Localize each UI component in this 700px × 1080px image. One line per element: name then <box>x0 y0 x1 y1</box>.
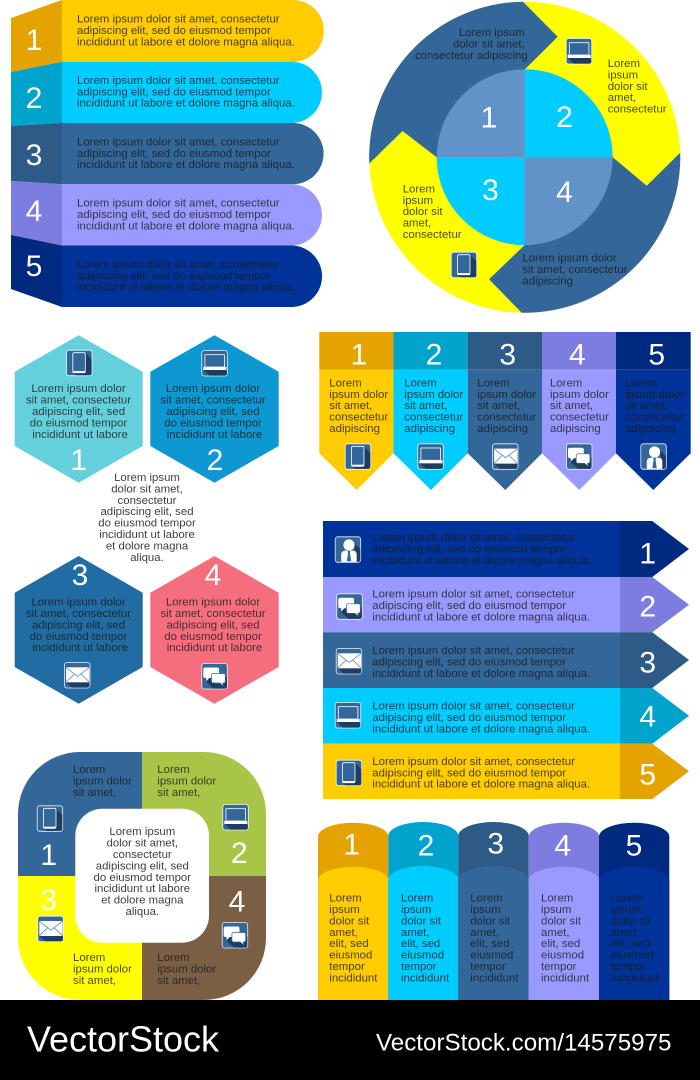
row 1: incididunt ut labore et dolore magna aliqua. <box>77 36 295 48</box>
arrow row 5: Lorem ipsum dolor sit amet, consectetur <box>372 756 575 768</box>
arrow row 2: Lorem ipsum dolor sit amet, consectetur <box>372 589 575 601</box>
row 5: incididunt ut labore et dolore magna aliqua. <box>77 282 295 294</box>
arrow row 4: incididunt ut labore et dolore magna aliqua. <box>372 723 590 735</box>
text: bottom-right: Lorem <box>157 952 190 964</box>
capped column 4: dolor sit <box>541 915 582 927</box>
capped column 4: ipsum <box>541 904 571 916</box>
capped column 3: incididunt <box>470 973 519 985</box>
capped column 5: Lorem <box>611 893 643 905</box>
panel: downward arrow columns <box>319 332 691 490</box>
arrow row 3: incididunt ut labore et dolore magna aliqua. <box>372 668 590 680</box>
arrow row 1: incididunt ut labore et dolore magna aliqua. <box>372 555 590 567</box>
column 5: 5 <box>648 338 665 371</box>
number 3: 3 <box>482 174 499 207</box>
column 1: consectetur <box>329 412 388 424</box>
row 3: 3 <box>26 139 42 172</box>
capped column 4: 4 <box>554 830 571 863</box>
row 3 <box>11 123 324 184</box>
text: centre: Lorem ipsum <box>109 826 175 838</box>
footer logo: VectorStock <box>27 1019 220 1060</box>
text: centre: et dolore magna <box>101 895 184 907</box>
hexagon 3: 3 <box>72 559 88 592</box>
text: centre: adipiscing elit, sed <box>96 860 189 872</box>
capped column 4: amet, <box>541 927 570 939</box>
arrow row 4: 4 <box>639 701 656 734</box>
text: bottom: sit amet, consectetur <box>522 264 628 276</box>
arrow: top-left blue <box>369 2 558 164</box>
number 1: 1 <box>481 102 497 134</box>
row 3: Lorem ipsum dolor sit amet, consectetur <box>77 136 280 148</box>
text: left: ipsum <box>403 195 433 207</box>
capped column 2: elit, sed <box>401 938 440 950</box>
capped column 1: incididunt <box>329 973 378 985</box>
column 1 <box>319 332 394 490</box>
text: centre: consectetur <box>113 849 172 861</box>
column 1: Lorem <box>329 377 362 389</box>
capped column 3: 3 <box>487 827 504 860</box>
text: centre: aliqua. <box>126 906 159 918</box>
text: bottom-left: ipsum dolor <box>73 963 132 975</box>
arrow row 1: Lorem ipsum dolor sit amet, consectetur <box>372 532 575 544</box>
text: centre: aliqua. <box>130 552 164 564</box>
capped column 3: dolor sit <box>470 915 511 927</box>
row 5: Lorem ipsum dolor sit amet, consectetur <box>77 259 280 271</box>
hexagon 2: adipiscing elit, sed <box>166 406 260 418</box>
hexagon 2: 2 <box>207 444 223 477</box>
column 2 <box>394 332 468 490</box>
column 5 <box>616 332 691 490</box>
column 4: Lorem <box>550 377 582 389</box>
column 3: 3 <box>499 338 516 371</box>
hexagon 2: incididunt ut labore <box>167 429 262 441</box>
hexagon 1: 1 <box>70 444 87 477</box>
arrow row 3: 3 <box>639 647 656 680</box>
row 5 <box>11 235 322 307</box>
icon: laptop <box>566 38 592 64</box>
quadrant 2 <box>142 752 266 876</box>
capped column 2: 2 <box>418 830 434 863</box>
panel: rounded square quadrants <box>18 752 266 1000</box>
quadrant 1 <box>18 752 142 876</box>
column 2: consectetur <box>404 412 463 424</box>
arrow row 4: Lorem ipsum dolor sit amet, consectetur <box>372 701 575 713</box>
text: top-left: Lorem <box>73 764 105 776</box>
panel: hexagons <box>15 335 279 704</box>
column 1: adipiscing <box>329 423 380 435</box>
hexagon 2: do eiusmod tempor <box>164 417 262 429</box>
hexagon 3 <box>15 556 143 704</box>
text: centre: incididunt ut labore <box>94 883 190 895</box>
capped column 2: eiusmod <box>401 950 444 962</box>
arrow row 1 <box>323 521 689 577</box>
capped column 1: 1 <box>343 828 360 861</box>
hexagon 4: adipiscing elit, sed <box>166 619 260 631</box>
text: left: amet, <box>403 218 431 230</box>
capped column 2: ipsum <box>401 904 431 916</box>
column 4: 4 <box>569 338 586 371</box>
capped column 4: incididunt <box>541 973 590 985</box>
row 2: 2 <box>26 82 42 115</box>
capped column 5: incididunt <box>611 973 660 985</box>
capped column 1: tempor <box>329 961 365 973</box>
arrow row 3: adipiscing elit, sed do eiusmod tempor <box>372 657 566 669</box>
column 3: sit amet, <box>477 400 520 412</box>
column 3: Lorem <box>477 377 510 389</box>
capped column 5: eiusmod <box>611 950 654 962</box>
row 1: 1 <box>26 24 42 57</box>
row 4: adipiscing elit, sed do eiusmod tempor <box>77 209 271 221</box>
row 5: 5 <box>26 250 42 283</box>
capped column 2 <box>388 822 458 1000</box>
row 3: adipiscing elit, sed do eiusmod tempor <box>77 148 271 160</box>
arrow row 5 <box>323 744 689 799</box>
row 4: Lorem ipsum dolor sit amet, consectetur <box>77 197 280 209</box>
column 5: adipiscing <box>625 423 676 435</box>
quadrant 3 <box>18 876 142 1000</box>
hexagon 1: Lorem ipsum dolor <box>31 383 126 395</box>
hexagon 1: sit amet, consectetur <box>26 395 131 407</box>
column 5: consectetur <box>625 412 684 424</box>
number 3: 3 <box>40 884 57 917</box>
capped column 4: tempor <box>541 961 577 973</box>
icon: phone <box>37 806 63 831</box>
hexagon 1 <box>15 335 143 483</box>
hexagon 4: sit amet, consectetur <box>160 608 266 620</box>
column 3: ipsum dolor <box>477 389 536 401</box>
icon: phone <box>451 252 477 278</box>
capped column 4: Lorem <box>541 893 573 905</box>
number 2: 2 <box>556 101 573 134</box>
hexagon 3: Lorem ipsum dolor <box>31 597 126 609</box>
hexagon 3: do eiusmod tempor <box>30 631 127 643</box>
column 5: Lorem <box>625 377 657 389</box>
capped column 4 <box>529 823 599 1000</box>
hexagon 1: do eiusmod tempor <box>30 417 127 429</box>
text: right: amet, <box>608 92 636 104</box>
text: top-right: Lorem <box>157 764 190 776</box>
capped column 1: Lorem <box>329 893 362 905</box>
number 1: 1 <box>40 839 57 872</box>
arrow row 2: adipiscing elit, sed do eiusmod tempor <box>372 600 566 612</box>
capped column 5: ipsum <box>611 904 641 916</box>
column 2: sit amet, <box>404 400 447 412</box>
column 3 <box>468 332 542 490</box>
text: centre: Lorem ipsum <box>114 472 180 484</box>
capped column 3: elit, sed <box>470 938 510 950</box>
hexagon 1: adipiscing elit, sed <box>32 406 125 418</box>
number 2: 2 <box>231 837 248 870</box>
arrow row 1: adipiscing elit, sed do eiusmod tempor <box>372 543 566 555</box>
row 1 <box>11 0 324 72</box>
column 2: Lorem <box>404 377 437 389</box>
row 2: adipiscing elit, sed do eiusmod tempor <box>77 86 271 98</box>
text: left: Lorem <box>403 183 435 195</box>
column 4: adipiscing <box>550 423 601 435</box>
text: centre: adipiscing elit, sed <box>100 506 194 518</box>
capped column 5: tempor <box>611 961 646 973</box>
column 4: consectetur <box>550 412 609 424</box>
hexagon 4: do eiusmod tempor <box>164 631 262 643</box>
column 1: sit amet, <box>329 400 372 412</box>
capped column 3: tempor <box>470 961 506 973</box>
hexagon 4 <box>150 556 279 704</box>
capped column 1: dolor sit <box>329 915 370 927</box>
column 2: adipiscing <box>404 423 455 435</box>
row 4 <box>11 181 322 246</box>
row 4: incididunt ut labore et dolore magna aliqua. <box>77 220 295 232</box>
hexagon 1: incididunt ut labore <box>32 429 128 441</box>
row 1: adipiscing elit, sed do eiusmod tempor <box>77 25 271 37</box>
text: left: dolor sit <box>403 206 443 218</box>
row 1: Lorem ipsum dolor sit amet, consectetur <box>77 14 280 26</box>
column 4: sit amet, <box>550 400 593 412</box>
capped column 4: elit, sed <box>541 938 580 950</box>
column 3: consectetur <box>477 412 536 424</box>
arrow row 5: incididunt ut labore et dolore magna aliqua. <box>372 779 590 791</box>
text: right: consectetur <box>608 104 667 116</box>
text: top-right: sit amet, <box>157 787 200 799</box>
capped column 2: dolor sit <box>401 915 442 927</box>
inner circle quadrants <box>437 69 613 245</box>
row 4: 4 <box>26 195 42 228</box>
capped column 5 <box>599 823 669 1000</box>
text: centre: dolor sit amet, <box>107 838 178 850</box>
text: centre: incididunt ut labore <box>99 529 195 541</box>
arrow row 3 <box>323 632 689 688</box>
hexagon 2 <box>150 335 279 483</box>
column 2: ipsum dolor <box>404 389 463 401</box>
panel: capped columns <box>318 822 669 1000</box>
column 2: 2 <box>426 338 442 371</box>
hexagon 3: sit amet, consectetur <box>26 608 131 620</box>
capped column 2: incididunt <box>401 973 450 985</box>
footer url: VectorStock.com/14575975 <box>376 1030 672 1057</box>
hexagon 3: adipiscing elit, sed <box>32 619 125 631</box>
capped column 3: Lorem <box>470 893 503 905</box>
text: bottom-right: ipsum dolor <box>157 963 216 975</box>
row 2: incididunt ut labore et dolore magna aliqua. <box>77 98 295 110</box>
arrow row 1: 1 <box>639 537 656 570</box>
text: right: Lorem <box>608 58 640 70</box>
arrow row 5: 5 <box>639 758 656 791</box>
row 5: adipiscing elit, sed do eiusmod tempor <box>77 270 271 282</box>
hexagon 2: sit amet, consectetur <box>160 395 266 407</box>
capped column 2: tempor <box>401 961 437 973</box>
row 2 <box>11 62 322 126</box>
text: bottom-left: sit amet, <box>73 975 116 987</box>
text: right: ipsum <box>608 69 638 81</box>
capped column 1: amet, <box>329 927 358 939</box>
capped column 5: dolor sit <box>611 915 651 927</box>
text: right: dolor sit <box>608 81 648 93</box>
capped column 5: 5 <box>626 829 642 862</box>
text: centre: do eiusmod tempor <box>94 872 191 884</box>
column 4 <box>542 332 616 490</box>
capped column 1 <box>318 823 388 1000</box>
text: centre: do eiusmod tempor <box>98 518 196 530</box>
arrow: bottom-right blue <box>489 153 680 313</box>
arrow row 2: incididunt ut labore et dolore magna aliqua. <box>372 611 590 623</box>
arrow row 4 <box>323 688 689 744</box>
text: top-left: sit amet, <box>73 787 116 799</box>
column 5: ipsum dolor <box>625 389 684 401</box>
column 5: sit amet, <box>625 400 668 412</box>
arrow row 5: adipiscing elit, sed do eiusmod tempor <box>372 767 566 779</box>
column 4: ipsum dolor <box>550 389 609 401</box>
panel: circular arrows <box>369 2 680 313</box>
column 3: adipiscing <box>477 423 528 435</box>
text: left: consectetur <box>403 229 462 241</box>
text: top-left: dolor sit amet, <box>453 38 525 50</box>
text: bottom-left: Lorem <box>73 952 105 964</box>
row 2: Lorem ipsum dolor sit amet, consectetur <box>77 75 280 87</box>
footer: black watermark bar <box>0 1000 700 1080</box>
text: bottom: Lorem ipsum dolor <box>522 253 617 265</box>
icon: laptop <box>223 804 248 830</box>
text: centre: consectetur <box>118 495 177 507</box>
capped column 2: amet, <box>401 927 430 939</box>
capped column 5: amet, <box>611 927 639 939</box>
arrow row 2 <box>323 577 689 632</box>
hexagon 4: incididunt ut labore <box>167 642 262 654</box>
capped column 5: elit, sed <box>611 938 650 950</box>
hexagon 2: Lorem ipsum dolor <box>166 383 260 395</box>
text: top-left: consectetur adipiscing <box>415 50 528 62</box>
column 1: 1 <box>351 338 367 371</box>
arrow row 2: 2 <box>639 591 656 624</box>
text: top-left: Lorem ipsum <box>459 27 525 39</box>
outer yellow ring <box>369 2 680 313</box>
text: bottom-right: sit amet, <box>157 975 200 987</box>
number 4: 4 <box>556 176 573 209</box>
text: centre: dolor sit amet, <box>111 483 183 495</box>
arrow row 4: adipiscing elit, sed do eiusmod tempor <box>372 712 566 724</box>
text: top-left: ipsum dolor <box>73 775 132 787</box>
number 4: 4 <box>229 886 245 919</box>
text: centre: et dolore magna <box>106 540 189 552</box>
capped column 1: eiusmod <box>329 950 372 962</box>
capped column 3: ipsum <box>470 904 501 916</box>
capped column 3 <box>458 822 529 1000</box>
capped column 3: amet, <box>470 927 499 939</box>
capped column 3: eiusmod <box>470 950 513 962</box>
capped column 1: elit, sed <box>329 938 369 950</box>
hexagon 4: 4 <box>205 559 221 592</box>
row 3: incididunt ut labore et dolore magna aliqua. <box>77 159 295 171</box>
capped column 4: eiusmod <box>541 950 584 962</box>
quadrant 4 <box>142 876 266 1000</box>
panel: stacked rounded rows <box>11 0 324 307</box>
hexagon 4: Lorem ipsum dolor <box>166 597 260 609</box>
capped column 1: ipsum <box>329 904 360 916</box>
hexagon 3: incididunt ut labore <box>32 642 128 654</box>
text: bottom: adipiscing <box>522 275 573 287</box>
panel: rightward arrow rows <box>323 521 689 799</box>
text: top-right: ipsum dolor <box>157 775 216 787</box>
centre white box <box>75 809 209 943</box>
icon: mail <box>38 916 63 942</box>
arrow row 3: Lorem ipsum dolor sit amet, consectetur <box>372 645 575 657</box>
column 1: ipsum dolor <box>329 389 388 401</box>
icon: chat <box>222 922 248 948</box>
capped column 2: Lorem <box>401 893 433 905</box>
